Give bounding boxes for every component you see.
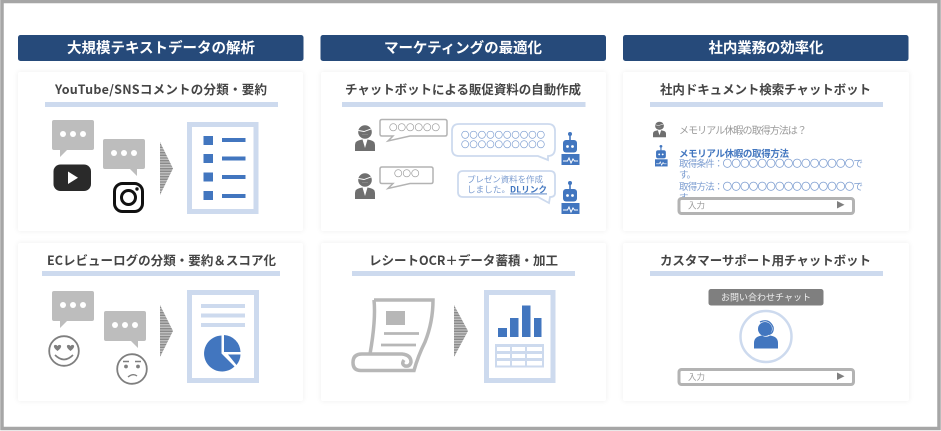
arrow bbox=[160, 142, 173, 195]
chat title pill bbox=[708, 289, 824, 306]
input box bbox=[679, 370, 854, 384]
bubble: user message 1: 〇〇〇〇〇〇 bbox=[389, 122, 440, 134]
panel: sales material chatbot bbox=[321, 72, 606, 231]
icon: list document bbox=[190, 124, 256, 212]
icon: support agent bbox=[740, 311, 792, 362]
icon: receipt scroll bbox=[353, 300, 433, 370]
bubble: bot presentation link: しました。 bbox=[467, 184, 510, 196]
panel: YouTube SNS comments: YouTube/SNSコメントの分類・要約 bbox=[54, 79, 267, 98]
column: text data analysis bbox=[18, 35, 304, 401]
bubble: user message 1 bbox=[380, 120, 447, 141]
bot answer bbox=[679, 146, 863, 204]
icon: Instagram bbox=[114, 184, 142, 212]
bot answer: す。 bbox=[679, 190, 696, 204]
icon: speech bubble 2 bbox=[104, 311, 146, 348]
bot answer: 取得方法：〇〇〇〇〇〇〇〇〇〇〇〇〇〇〇で bbox=[679, 179, 863, 193]
heading: marketing optimisation: マーケティングの最適化 bbox=[384, 37, 542, 58]
column: internal efficiency bbox=[623, 35, 909, 401]
icon: report document with pie chart bbox=[190, 292, 256, 380]
icon: robot 1 bbox=[562, 132, 580, 165]
icon: YouTube bbox=[54, 164, 91, 191]
icon: speech bubble 2 bbox=[103, 139, 145, 176]
bubble: bot answer: 〇〇〇〇〇〇〇〇〇〇 bbox=[461, 138, 545, 150]
panel: YouTube SNS comments bbox=[18, 72, 303, 231]
icon: unhappy face bbox=[117, 354, 147, 384]
heading: text data analysis: 大規模テキストデータの解析 bbox=[67, 37, 256, 58]
panel: receipt OCR bbox=[321, 243, 606, 401]
icon: robot bbox=[655, 145, 668, 166]
panel: document search chatbot bbox=[623, 72, 909, 231]
icon: speech bubble 1 bbox=[52, 291, 94, 328]
panel: EC review logs: ECレビューログの分類・要約＆スコア化 bbox=[47, 250, 276, 269]
panel: customer support chatbot: カスタマーサポート用チャットボット bbox=[660, 250, 871, 269]
panel: EC review logs bbox=[18, 243, 303, 401]
icon: person 1 bbox=[355, 125, 375, 151]
chat title pill: お問い合わせチャット bbox=[721, 290, 811, 304]
panel: document search chatbot: 社内ドキュメント検索チャットボット bbox=[660, 79, 871, 98]
input box: 入力 bbox=[688, 371, 705, 383]
bot answer: 取得条件：〇〇〇〇〇〇〇〇〇〇〇〇〇〇〇で bbox=[679, 156, 863, 170]
arrow bbox=[160, 305, 173, 357]
bot answer: メモリアル休暇の取得方法 bbox=[679, 146, 789, 160]
panel: sales material chatbot: チャットボットによる販促資料の自動作成 bbox=[345, 79, 581, 98]
icon: person 2 bbox=[355, 173, 375, 199]
bubble: bot answer bbox=[452, 124, 555, 160]
user question: メモリアル休暇の取得方法は？ bbox=[679, 122, 807, 137]
heading: internal efficiency: 社内業務の効率化 bbox=[708, 37, 824, 58]
bot answer: す。 bbox=[679, 167, 696, 181]
icon: speech bubble 1 bbox=[52, 120, 94, 157]
icon: person bbox=[653, 122, 666, 137]
bubble: bot presentation link: DLリンク bbox=[510, 184, 547, 196]
panel: customer support chatbot bbox=[623, 243, 909, 401]
heading: internal efficiency bbox=[623, 35, 908, 61]
bubble: bot presentation link: プレゼン資料を作成 bbox=[467, 174, 543, 186]
bubble: bot presentation link bbox=[458, 171, 555, 203]
heading: marketing optimisation bbox=[320, 35, 606, 61]
icon: happy face bbox=[49, 336, 79, 366]
column: marketing optimisation bbox=[320, 35, 606, 401]
bubble: user message 2: 〇〇〇 bbox=[394, 168, 420, 180]
input box bbox=[679, 198, 854, 214]
icon: chart document bbox=[486, 292, 553, 380]
bubble: bot answer: 〇〇〇〇〇〇〇〇〇〇 bbox=[461, 129, 545, 141]
icon: robot 2 bbox=[562, 181, 580, 214]
heading: text data analysis bbox=[18, 35, 304, 61]
bubble: user message 2 bbox=[380, 167, 433, 188]
arrow bbox=[454, 305, 468, 357]
panel: receipt OCR: レシートOCR＋データ蓄積・加工 bbox=[369, 250, 558, 269]
input box: 入力 bbox=[688, 200, 705, 212]
